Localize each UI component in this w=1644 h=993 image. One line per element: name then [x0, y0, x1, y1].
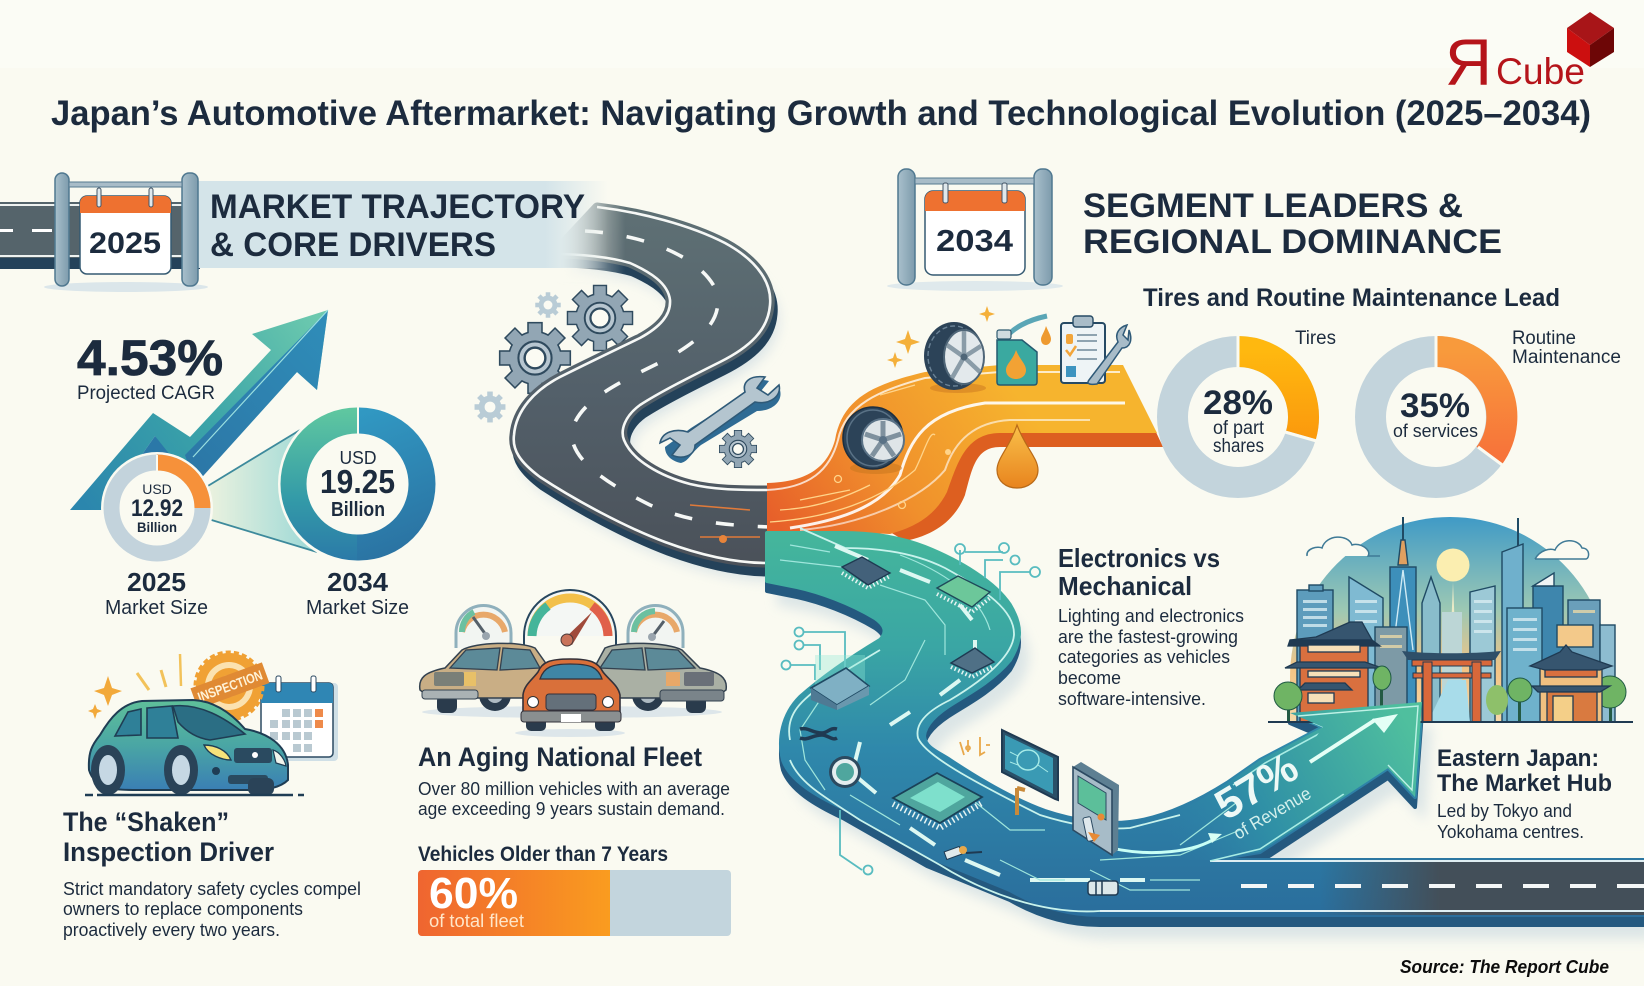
arrow head overlay — [1290, 702, 1422, 797]
comparison cone — [193, 430, 317, 552]
bar chart heading: Vehicles Older than 7 Years — [418, 843, 668, 866]
text: eastern japan: Led by Tokyo and — [1437, 801, 1572, 821]
title: Japan’s Automotive Aftermarket: Navigating Growth and Technological Evolution (2025–2034) — [51, 94, 1591, 133]
icon: teal car with inspection stamp and calendar — [85, 653, 338, 795]
inspection stamp — [190, 653, 269, 719]
icon: aging cars — [420, 643, 726, 737]
heading: market trajectory — [210, 188, 585, 264]
progress bar: 60% of fleet: of total fleet — [429, 911, 524, 931]
teal digital road section — [767, 528, 1644, 939]
calendar — [261, 676, 338, 761]
icon: clipboard and wrench — [1061, 316, 1131, 384]
text: electronics vs mechanical: software-intensive. — [1058, 689, 1206, 709]
donut: 2034 market size: Billion — [331, 499, 385, 521]
sign: 2025 calendar — [44, 173, 208, 292]
circuit nodes above the road — [782, 543, 1040, 874]
towers — [1297, 517, 1615, 722]
label: 2034 market size — [306, 567, 409, 619]
text: eastern japan: Eastern Japan: — [1437, 745, 1599, 772]
text: shaken inspection driver — [63, 807, 361, 940]
text: electronics vs mechanical: Mechanical — [1058, 571, 1192, 601]
icon: gears — [475, 286, 756, 467]
text: eastern japan: The Market Hub — [1437, 770, 1612, 797]
logo: RCube: Я — [1445, 25, 1492, 99]
heading: segment leaders — [1083, 187, 1502, 261]
donut: 2025 market size: Billion — [137, 519, 177, 535]
donut: 2034 market size — [278, 404, 438, 564]
icon: road sign screen — [960, 730, 1058, 815]
text: electronics vs mechanical: categories as vehicles — [1058, 647, 1230, 667]
label: 2025 market size: Market Size — [105, 597, 208, 619]
text: shaken inspection driver: Strict mandatory safety cycles compel — [63, 879, 361, 899]
57% of revenue: 57% — [1206, 743, 1306, 829]
donut: 2034 market size: USD — [340, 448, 376, 468]
rays and sparkles — [88, 654, 181, 719]
donut chart: tires 28%: 28% — [1203, 384, 1273, 422]
progress bar: 60% of fleet: 60% — [429, 869, 518, 918]
section banner: market trajectory — [190, 181, 610, 268]
icon: tire upper — [924, 322, 986, 393]
chart subtitle: Tires and Routine Maintenance Lead — [1143, 284, 1560, 312]
progress bar: 60% of fleet — [418, 869, 731, 936]
donut chart: routine maintenance 35% — [1370, 335, 1505, 482]
text: eastern japan: Yokohama centres. — [1437, 822, 1584, 842]
donut chart: routine maintenance 35%: 35% — [1400, 387, 1470, 425]
icons: chips on road — [800, 557, 1118, 895]
donut chart: tires 28%: shares — [1213, 436, 1264, 457]
donut: 2034 market size: 19.25 — [320, 463, 395, 500]
label: routine maintenance — [1512, 328, 1621, 368]
central road: gray section — [514, 207, 778, 581]
text: electronics vs mechanical: Lighting and electronics — [1058, 606, 1244, 626]
text: electronics vs mechanical: are the fastest-growing — [1058, 627, 1238, 647]
text: aging national fleet: An Aging National Fleet — [418, 742, 702, 772]
source note: Source: The Report Cube — [1400, 957, 1609, 977]
cagr stat: Projected CAGR — [77, 383, 215, 404]
sky — [1290, 517, 1610, 722]
donut: 2025 market size: 12.92 — [131, 495, 183, 522]
icon: gauges — [456, 590, 683, 650]
left temple — [1285, 622, 1382, 722]
growth arrow — [70, 310, 328, 510]
text: shaken inspection driver: proactively every two years. — [63, 920, 280, 940]
label: routine maintenance: Routine — [1512, 328, 1576, 349]
icon: tire lower — [843, 407, 904, 474]
logo: RCube: Cube — [1496, 51, 1585, 92]
text: electronics vs mechanical: become — [1058, 668, 1121, 688]
torii gate — [1402, 651, 1501, 722]
donut chart: routine maintenance 35%: of services — [1393, 421, 1478, 441]
label: 2034 market size: 2034 — [327, 567, 389, 597]
label: tires: Tires — [1295, 328, 1336, 349]
trees — [1274, 666, 1626, 722]
text: aging national fleet: age exceeding 9 years sustain demand. — [418, 799, 725, 819]
icon: handheld device — [1073, 762, 1119, 855]
heading: segment leaders: REGIONAL DOMINANCE — [1083, 223, 1502, 261]
donut chart: tires 28%: of part — [1213, 418, 1265, 439]
text: shaken inspection driver: owners to replace components — [63, 899, 303, 919]
building windows — [1303, 600, 1595, 651]
right temple — [1530, 645, 1612, 722]
orange road section — [767, 365, 1163, 541]
donut chart: tires 28% — [1172, 335, 1320, 482]
heading: market trajectory: & CORE DRIVERS — [210, 226, 496, 264]
icon: sparkles — [887, 306, 995, 368]
inspection stamp: INSPECTION — [196, 667, 265, 705]
57% of revenue: of Revenue — [1230, 783, 1314, 843]
sign: 2034 calendar: 2034 — [936, 223, 1014, 258]
logo: RCube — [1445, 12, 1614, 99]
cagr stat: 4.53% — [77, 330, 223, 386]
grey car — [592, 643, 726, 713]
sign: 2025 calendar: 2025 — [89, 227, 161, 260]
clouds — [1307, 537, 1589, 559]
car body — [89, 700, 288, 790]
text: shaken inspection driver: The “Shaken” — [63, 807, 229, 837]
icon: oil jug — [997, 316, 1051, 385]
wheels — [91, 745, 274, 795]
label: 2025 market size: 2025 — [127, 567, 186, 597]
label: 2034 market size: Market Size — [306, 597, 409, 619]
label: 2025 market size — [105, 567, 208, 619]
orange car — [521, 659, 621, 731]
text: shaken inspection driver: Inspection Driver — [63, 837, 274, 867]
tan car — [420, 643, 552, 713]
sun — [1436, 548, 1470, 582]
text: aging national fleet — [418, 742, 730, 819]
left road entrance — [0, 202, 200, 269]
illustration: city skyline — [1268, 517, 1633, 722]
text: electronics vs mechanical — [1058, 543, 1244, 709]
text: aging national fleet: Over 80 million vehicles with an average — [418, 779, 730, 799]
label: routine maintenance: Maintenance — [1512, 347, 1621, 368]
donut: 2025 market size: USD — [142, 481, 172, 497]
heading: segment leaders: SEGMENT LEADERS & — [1083, 187, 1463, 225]
text: electronics vs mechanical: Electronics vs — [1058, 543, 1220, 573]
icon: wrench — [660, 377, 781, 463]
heading: market trajectory: MARKET TRAJECTORY — [210, 188, 585, 226]
icon: oil drop — [997, 425, 1038, 488]
donut: 2025 market size — [101, 452, 213, 564]
sign: 2034 calendar — [887, 169, 1063, 291]
text: eastern japan — [1437, 745, 1612, 842]
